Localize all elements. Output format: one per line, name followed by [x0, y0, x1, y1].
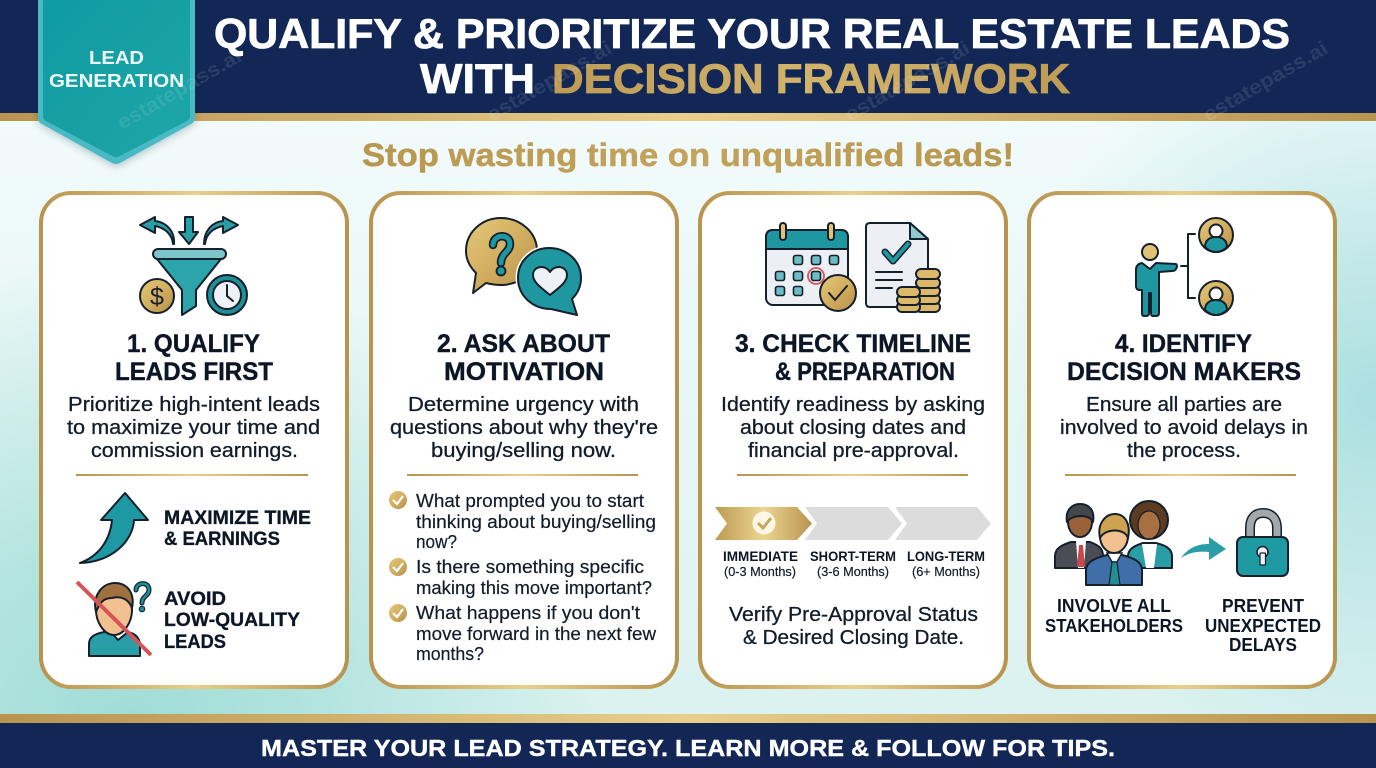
watermarks: [114, 37, 1332, 134]
heading 4: [1067, 330, 1301, 386]
arrow: stakeholders to lock: [1181, 537, 1226, 560]
watermarks: estatepass.ai: [114, 45, 246, 134]
footer call to action: MASTER YOUR LEAD STRATEGY. LEARN MORE & FOLLOW FOR TIPS.: [261, 735, 1115, 761]
title: WITH: [420, 55, 535, 102]
timeline chevrons: [715, 507, 991, 540]
timeline labels: LONG-TERM: [907, 549, 985, 564]
icon: rising arrow: [80, 493, 148, 563]
title: QUALIFY & PRIORITIZE YOUR REAL ESTATE LEADS: [214, 10, 1290, 57]
question 1: What prompted you to start: [416, 491, 644, 511]
heading 2: MOTIVATION: [444, 358, 604, 386]
timeline labels: [723, 549, 985, 579]
title: [214, 10, 1290, 102]
heading 3: 3. CHECK TIMELINE: [735, 330, 971, 358]
icon: padlock: [1237, 513, 1288, 576]
badge: lead generation: LEAD: [89, 48, 144, 68]
heading 2: 2. ASK ABOUT: [437, 330, 610, 358]
timeline labels: (3-6 Months): [817, 565, 889, 579]
label: involve all stakeholders: INVOLVE ALL: [1057, 596, 1171, 616]
icon: funnel with coin and clock: [140, 217, 247, 315]
label: prevent unexpected delays: PREVENT: [1222, 596, 1304, 616]
question 3: months?: [416, 644, 484, 664]
body text 3: [721, 394, 985, 462]
panel: 4 identify decision makers: [1029, 193, 1335, 687]
watermarks: estatepass.ai: [484, 37, 616, 126]
card frame 3: [700, 193, 1006, 687]
check bullet 1: [389, 491, 407, 509]
heading 1: 1. QUALIFY: [127, 330, 260, 358]
icon: speech bubbles: [466, 218, 581, 315]
body text 1: Prioritize high-intent leads: [68, 394, 320, 416]
label: prevent unexpected delays: DELAYS: [1229, 635, 1297, 655]
label: avoid low-quality leads: AVOID: [164, 589, 226, 610]
timeline labels: IMMEDIATE: [723, 549, 798, 564]
footer band: [0, 714, 1376, 768]
body text 4: involved to avoid delays in: [1060, 417, 1308, 439]
question 1: [416, 491, 656, 552]
body text 1: commission earnings.: [91, 440, 298, 462]
label: maximize time: & EARNINGS: [164, 529, 280, 550]
badge: lead generation: [38, 0, 195, 164]
timeline labels: SHORT-TERM: [810, 549, 896, 564]
icon: calendar with check: [766, 223, 856, 311]
heading 3: [735, 330, 971, 386]
body text 1: to maximize your time and: [67, 417, 320, 439]
icon: confused person crossed out: [77, 582, 151, 656]
question 3: [416, 603, 657, 664]
check bullet 3: [389, 604, 407, 622]
label: avoid low-quality leads: LEADS: [164, 632, 226, 653]
heading 1: LEADS FIRST: [115, 358, 273, 386]
watermarks: estatepass.ai: [842, 37, 974, 126]
chevron: long-term: [895, 507, 991, 540]
icon: document with coins: [866, 223, 940, 312]
label: involve all stakeholders: STAKEHOLDERS: [1045, 616, 1183, 636]
body text 2: Determine urgency with: [408, 394, 639, 416]
verify note: Verify Pre-Approval Status: [729, 604, 978, 626]
heading 4: 4. IDENTIFY: [1115, 330, 1252, 358]
panel: 2 ask about motivation: [371, 193, 677, 687]
body text 3: Identify readiness by asking: [721, 394, 985, 416]
body text 3: about closing dates and: [740, 417, 966, 439]
body text 2: questions about why they're: [390, 417, 658, 439]
heading 4: DECISION MAKERS: [1067, 358, 1301, 386]
card frame 4: [1029, 193, 1335, 687]
title: DECISION FRAMEWORK: [552, 55, 1070, 102]
subheading: Stop wasting time on unqualified leads!: [362, 137, 1014, 173]
label: involve all stakeholders: [1045, 596, 1183, 636]
watermarks: estatepass.ai: [1200, 37, 1332, 126]
timeline labels: (0-3 Months): [724, 565, 796, 579]
badge: lead generation: GENERATION: [49, 71, 184, 91]
label: prevent unexpected delays: [1205, 596, 1321, 655]
body text 4: the process.: [1127, 440, 1241, 462]
panel: 1 qualify leads first: [41, 193, 347, 687]
question 2: Is there something specific: [416, 557, 644, 577]
body text 2: [390, 394, 658, 462]
question 3: What happens if you don't: [416, 603, 640, 623]
verify note: & Desired Closing Date.: [743, 627, 964, 649]
question 2: [416, 557, 652, 598]
question 2: making this move important?: [416, 578, 652, 598]
card frame 1: [41, 193, 347, 687]
header band: [0, 0, 1376, 121]
check bullet 2: [389, 558, 407, 576]
timeline labels: (6+ Months): [912, 565, 980, 579]
label: avoid low-quality leads: [164, 589, 300, 653]
card frame 2: [371, 193, 677, 687]
icon: funnel with coin and clock: $: [150, 283, 164, 311]
label: prevent unexpected delays: UNEXPECTED: [1205, 616, 1321, 636]
question 1: now?: [416, 532, 457, 552]
body text 4: Ensure all parties are: [1086, 394, 1282, 416]
checklist of questions: [389, 491, 657, 664]
label: maximize time: MAXIMIZE TIME: [164, 508, 311, 529]
label: maximize time: [164, 508, 311, 550]
icon: person pointing to two contacts: [1136, 218, 1233, 316]
question 3: move forward in the next few: [416, 624, 657, 644]
heading 2: [437, 330, 610, 386]
panel: 3 check timeline and preparation: [700, 193, 1006, 687]
chevron: short-term: [805, 507, 902, 540]
icon: group of stakeholders: [1055, 501, 1172, 585]
body text 1: [67, 394, 320, 462]
body text 4: [1060, 394, 1308, 462]
verify note: [729, 604, 978, 649]
label: avoid low-quality leads: LOW-QUALITY: [164, 610, 300, 631]
heading 3: & PREPARATION: [775, 358, 955, 386]
body text 2: buying/selling now.: [431, 440, 616, 462]
body text 3: financial pre-approval.: [748, 440, 959, 462]
question 1: thinking about buying/selling: [416, 512, 656, 532]
chevron: immediate: [715, 507, 812, 540]
heading 1: [115, 330, 273, 386]
